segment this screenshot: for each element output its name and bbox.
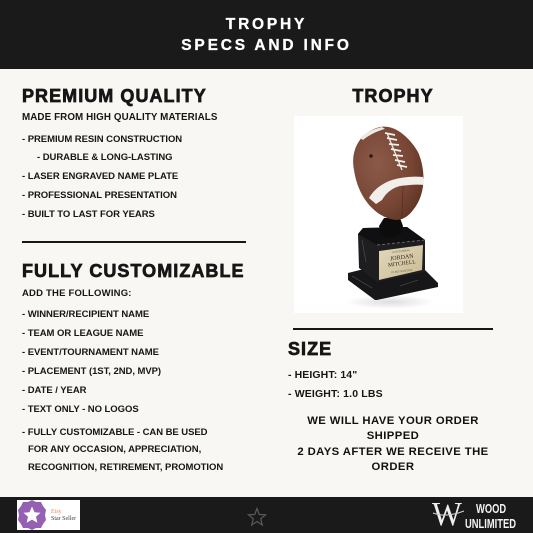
- badge: etsy star seller: Star Seller: [51, 516, 76, 522]
- name plate: JORDAN: [390, 254, 415, 262]
- name plate: OUTSTANDING: [392, 249, 410, 254]
- icon: outline star: [247, 507, 267, 526]
- name plate: [379, 245, 423, 280]
- logo: wood unlimited: UNLIMITED: [465, 516, 516, 531]
- logo: wood unlimited: W: [432, 496, 462, 532]
- subheading: add the following: ADD THE FOLLOWING:: [22, 288, 132, 299]
- heading: fully customizable: FULLY CUSTOMIZABLE: [22, 261, 245, 281]
- list: customization options: [22, 309, 161, 415]
- product image: football trophy: [294, 116, 463, 313]
- list: customization options: - WINNER/RECIPIENT NAME: [22, 309, 149, 320]
- badge: etsy star seller: [17, 500, 80, 530]
- subheading: materials: MADE FROM HIGH QUALITY MATERIALS: [22, 112, 218, 123]
- list: quality features: - PROFESSIONAL PRESENTATION: [22, 190, 177, 201]
- list: customization options: - TEAM OR LEAGUE NAME: [22, 328, 143, 339]
- list: customization options: - PLACEMENT (1ST, 2ND, MVP): [22, 366, 161, 377]
- list: customization options: - DATE / YEAR: [22, 385, 86, 396]
- header title: SPECS AND INFO: [181, 37, 352, 54]
- spec: weight: - WEIGHT: 1.0 LBS: [288, 388, 383, 400]
- list: customization options: - EVENT/TOURNAMENT NAME: [22, 347, 159, 358]
- note: customization uses: RECOGNITION, RETIREMENT, PROMOTION: [28, 462, 223, 473]
- list: quality features: - LASER ENGRAVED NAME PLATE: [22, 171, 178, 182]
- spec: height: - HEIGHT: 14": [288, 369, 357, 381]
- heading: size: SIZE: [288, 339, 332, 359]
- football: [353, 127, 424, 220]
- logo: wood unlimited: WOOD: [476, 501, 506, 516]
- logo: wood unlimited: [432, 496, 516, 532]
- note: customization uses: FOR ANY OCCASION, APPRECIATION,: [28, 444, 201, 455]
- footer band: [0, 497, 533, 533]
- list: quality features: - PREMIUM RESIN CONSTRUCTION: [22, 134, 182, 145]
- header title: [181, 16, 352, 54]
- header title: TROPHY: [226, 16, 307, 33]
- name plate: MITCHELL: [388, 259, 417, 269]
- heading: premium quality: PREMIUM QUALITY: [22, 86, 207, 106]
- list: customization options: - TEXT ONLY - NO LOGOS: [22, 404, 139, 415]
- list: quality features: - BUILT TO LAST FOR YEARS: [22, 209, 155, 220]
- trophy base: [348, 270, 438, 300]
- name plate: IN RECOGNITION: [391, 269, 413, 274]
- callout: shipping: WE WILL HAVE YOUR ORDER SHIPPED: [307, 415, 479, 442]
- heading: trophy: TROPHY: [352, 86, 434, 106]
- callout: shipping: 2 DAYS AFTER WE RECEIVE THE ORDER: [297, 446, 489, 473]
- panel: size: [288, 339, 383, 400]
- list: quality features: - DURABLE & LONG-LASTING: [37, 152, 172, 163]
- note: customization uses: - FULLY CUSTOMIZABLE - CAN BE USED: [22, 427, 208, 438]
- panel: premium quality: [22, 86, 218, 220]
- icon: seller star: [18, 500, 46, 530]
- note: customization uses: [22, 427, 223, 473]
- list: quality features: [22, 134, 182, 220]
- panel: fully customizable: [22, 261, 245, 473]
- callout: shipping: [297, 415, 489, 473]
- badge: etsy star seller: Etsy: [51, 509, 62, 515]
- header band: [0, 0, 533, 69]
- trophy stem: [379, 218, 403, 237]
